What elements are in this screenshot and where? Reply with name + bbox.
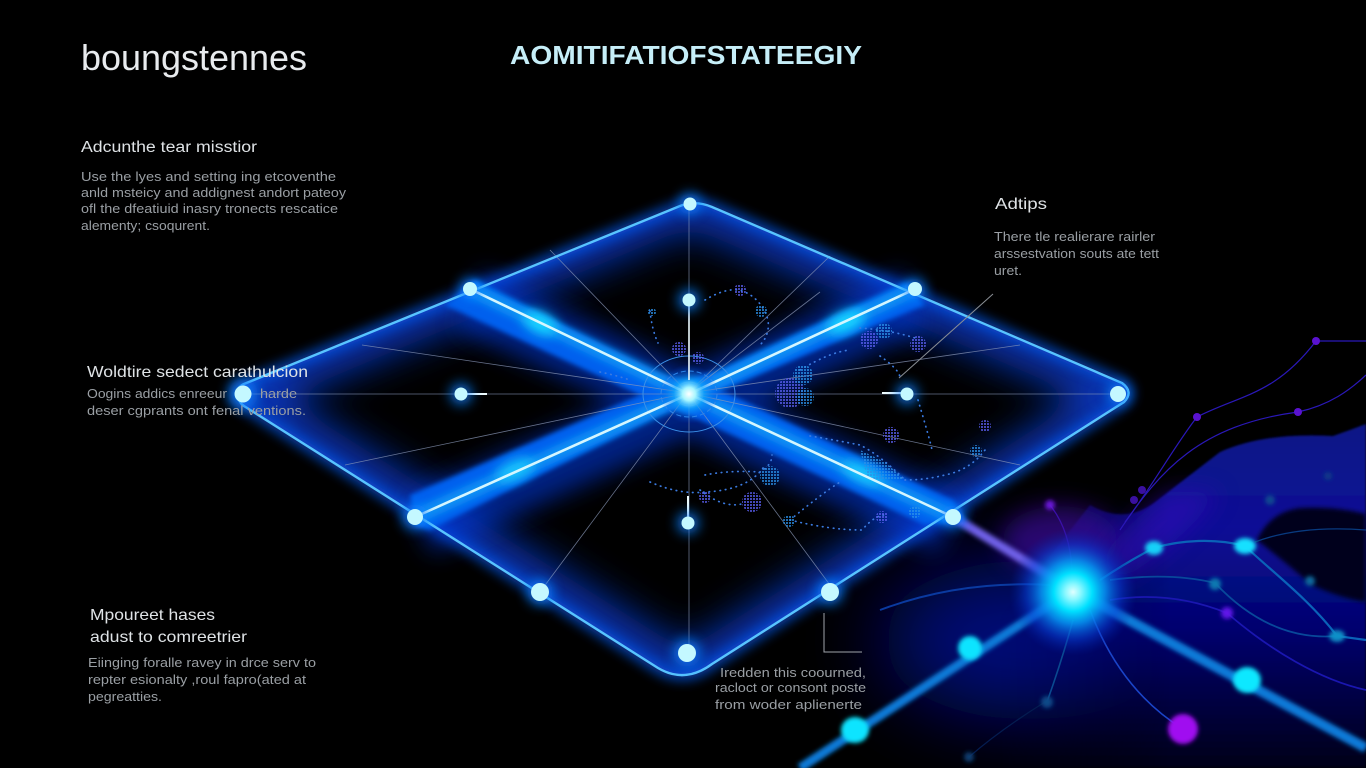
body: Eiinging foralle ravey in drce serv to xyxy=(88,655,316,670)
diamond outline xyxy=(238,203,1129,675)
text block: top right xyxy=(994,196,1159,278)
text block: bottom center: racloct or consont poste xyxy=(715,680,866,695)
body: harde xyxy=(260,386,297,401)
text block: top left xyxy=(81,139,347,233)
inner edge glow xyxy=(238,204,1128,676)
band glow: both diagonals xyxy=(420,300,950,525)
diagonal bright lines xyxy=(415,289,953,517)
heading xyxy=(90,607,248,646)
purple haze xyxy=(1002,506,1118,574)
center burst xyxy=(659,364,719,424)
heading: Adtips xyxy=(995,196,1047,213)
band: falling diagonal xyxy=(445,280,965,525)
body: arssestvation souts ate tett xyxy=(994,246,1159,261)
band core: falling xyxy=(470,289,953,517)
isometric diamond diagram xyxy=(228,193,1129,676)
leader line: right note xyxy=(899,294,993,378)
title: AOMITIFATIOFSTATEEGIY xyxy=(510,40,862,70)
text block: bottom center: Iredden this coourned, xyxy=(720,665,866,680)
body xyxy=(87,386,306,418)
curved connector lines xyxy=(880,505,1366,757)
concentric center rings xyxy=(643,356,735,432)
hub glow xyxy=(1009,528,1137,656)
brand heading: boungstennes xyxy=(81,37,307,78)
dark right pocket xyxy=(1257,508,1366,602)
spokes xyxy=(243,204,1118,653)
text block: bottom center: from woder aplienerte xyxy=(715,697,862,712)
body xyxy=(994,229,1159,278)
body xyxy=(88,655,316,704)
body: There tle realierare rairler xyxy=(994,229,1156,244)
body: Oogins addics enreeur xyxy=(87,386,228,401)
upper purple circuit xyxy=(1120,341,1366,530)
text block: middle left xyxy=(87,364,308,418)
network background: bottom right xyxy=(800,337,1366,768)
heading: Adcunthe tear misstior xyxy=(81,139,257,156)
body: alementy; csoqurent. xyxy=(81,218,210,233)
body: deser cgprants ont fenal ventions. xyxy=(87,403,306,418)
text block: bottom left xyxy=(88,607,316,704)
band bright patches xyxy=(493,305,886,491)
body: ofl the dfeatiuid inasry tronects rescatice xyxy=(81,201,338,216)
dotted data trails xyxy=(600,290,985,530)
thick trunk lines xyxy=(800,517,1366,768)
navy glow around hub xyxy=(880,560,1180,720)
body: anld msteicy and addignest andort pateoy xyxy=(81,185,347,200)
heading: adust to comreetrier xyxy=(90,629,248,646)
band: rising diagonal xyxy=(410,283,925,530)
body: uret. xyxy=(994,263,1022,278)
flowing wave and navy field xyxy=(1060,423,1366,768)
band core: rising xyxy=(415,289,915,517)
outer edge glow xyxy=(238,203,1129,675)
diagram node glows xyxy=(228,193,1129,667)
body: repter esionalty ,roul fapro(ated at xyxy=(88,672,306,687)
text block: bottom center xyxy=(715,665,866,712)
purple node xyxy=(1168,714,1198,744)
body: pegreatties. xyxy=(88,689,162,704)
node stubs xyxy=(461,300,907,523)
network nodes xyxy=(841,472,1345,762)
heading: Mpoureet hases xyxy=(90,607,215,624)
heading: Woldtire sedect carathulcion xyxy=(87,364,308,381)
upper purple nodes xyxy=(1130,337,1320,504)
violet wave tint xyxy=(1100,492,1220,580)
leader line: bottom note xyxy=(824,613,862,652)
body: Use the lyes and setting ing etcoventhe xyxy=(81,169,336,184)
diagram nodes xyxy=(234,198,1126,662)
body xyxy=(81,169,347,233)
particle clusters xyxy=(648,284,991,527)
